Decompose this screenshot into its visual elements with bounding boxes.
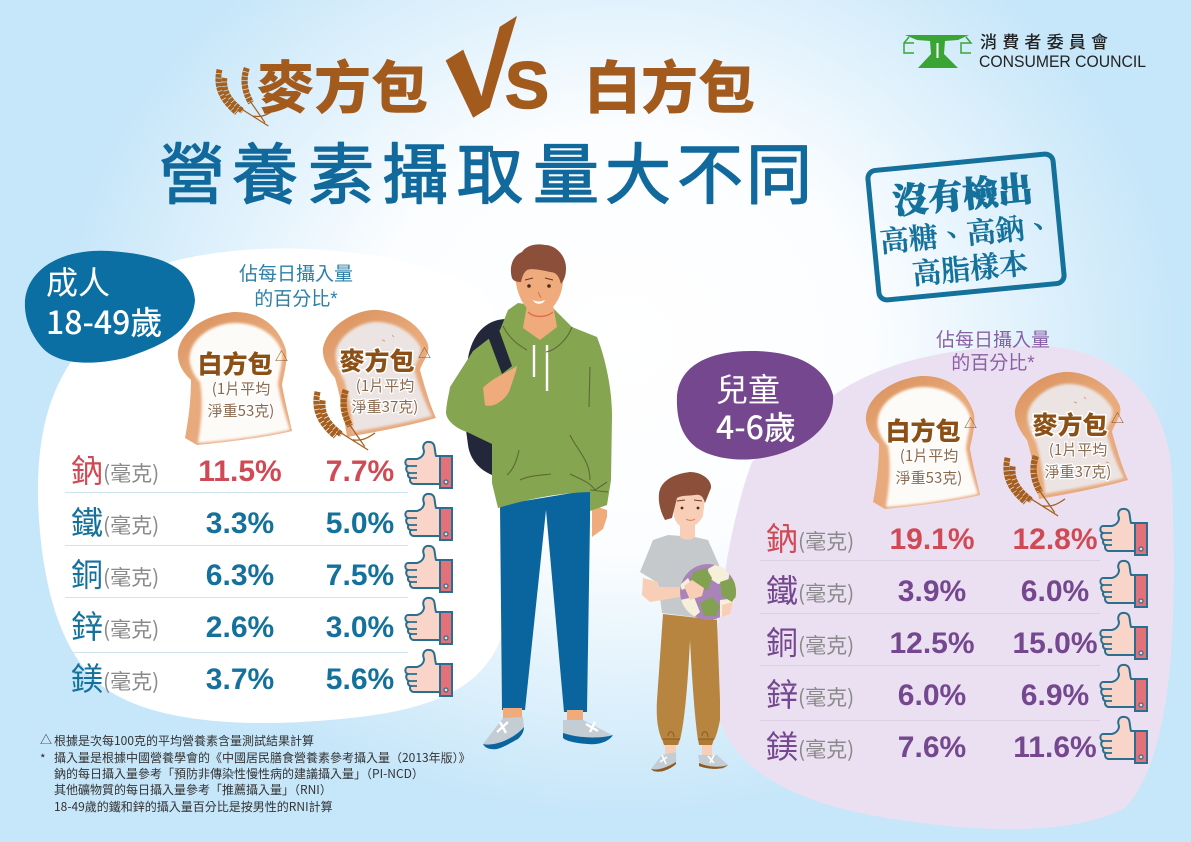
row: copper xyxy=(766,613,1147,664)
hoodie cords xyxy=(534,345,547,391)
row: zinc: 鋅 xyxy=(71,602,103,648)
bread: child wholemeal bread: 淨重37克) xyxy=(1045,461,1111,482)
bread: adult white bread: 淨重53克) xyxy=(208,400,274,421)
laces xyxy=(660,755,714,764)
pants xyxy=(657,614,720,740)
right hand xyxy=(592,505,607,537)
ankles xyxy=(503,708,583,724)
row: iron: 5.0% xyxy=(326,507,394,540)
row: magnesium: (毫克) xyxy=(798,734,854,764)
pants xyxy=(500,490,590,712)
bread: adult white bread: 白方包 xyxy=(197,345,273,381)
hands xyxy=(684,580,733,617)
title: first line xyxy=(218,0,755,157)
illustration: boy with ball xyxy=(640,472,740,772)
bread: adult wholemeal bread xyxy=(316,310,436,450)
backpack xyxy=(466,319,514,475)
row: zinc: 2.6% xyxy=(206,611,274,644)
heading: wholemeal bread: 麥方包 xyxy=(257,43,428,125)
left hand xyxy=(483,366,517,406)
bread: adult wholemeal bread: 淨重37克) xyxy=(352,396,418,417)
boy face xyxy=(677,500,702,520)
logo text: Chinese: 消費者委員會 xyxy=(980,28,1113,53)
row: magnesium: 5.6% xyxy=(326,663,394,696)
row: magnesium xyxy=(766,717,1147,768)
row: copper: 銅 xyxy=(766,618,798,664)
arm xyxy=(642,578,705,602)
ankles xyxy=(665,745,712,755)
row: zinc: 鋅 xyxy=(766,670,798,716)
footnotes: * xyxy=(40,750,46,767)
row: magnesium: 3.7% xyxy=(206,663,274,696)
table: adults xyxy=(71,442,452,700)
bread: child wholemeal bread: (1片平均 xyxy=(1049,439,1107,460)
row: sodium: 7.7% xyxy=(326,455,394,488)
caption: adult daily intake: 的百分比* xyxy=(254,288,338,310)
caption: child daily intake xyxy=(936,329,1050,374)
footnotes: △ xyxy=(40,731,52,748)
icon: title wheat xyxy=(218,68,275,126)
bread: child white bread xyxy=(866,376,980,509)
row: sodium: 鈉 xyxy=(766,514,798,560)
badge: children 4-6 xyxy=(677,351,833,460)
shirt xyxy=(640,535,720,620)
bread: child white bread: 白方包 xyxy=(885,412,961,448)
badge: adults 18-49 xyxy=(25,251,195,363)
row: sodium: 12.8% xyxy=(1012,523,1098,556)
footnotes: 鈉的每日攝入量參考「預防非傳染性慢性病的建議攝入量」（PI-NCD） xyxy=(54,765,424,782)
icon: green scale xyxy=(904,35,971,68)
row: copper: 12.5% xyxy=(889,627,975,660)
row: iron xyxy=(766,561,1147,612)
footnotes: 攝入量是根據中國營養學會的《中國居民膳食營養素參考攝入量（2013年版）》 xyxy=(54,749,471,766)
row: magnesium: 11.6% xyxy=(1013,731,1097,764)
row: zinc: 3.0% xyxy=(326,611,394,644)
footnotes xyxy=(40,731,471,815)
row: copper: (毫克) xyxy=(798,630,854,660)
row: magnesium xyxy=(71,650,452,700)
badge: children 4-6: 兒童 xyxy=(716,365,780,411)
shoulder strap xyxy=(487,327,512,374)
laces xyxy=(497,722,598,733)
row: magnesium: 7.6% xyxy=(898,731,966,764)
bread: adult white bread xyxy=(178,312,292,445)
row: sodium: 鈉 xyxy=(71,446,103,492)
illustration: man with backpack xyxy=(446,244,613,749)
bread: adult white bread: (1片平均 xyxy=(212,378,270,399)
panel: child background xyxy=(715,346,1174,829)
bread: adult wholemeal bread: 麥方包 xyxy=(339,342,415,378)
row: magnesium: 鎂 xyxy=(766,722,798,768)
logo: Consumer Council xyxy=(904,28,1146,71)
footnotes: 18-49歲的鐵和鋅的攝入量百分比是按男性的RNI計算 xyxy=(54,798,333,815)
caption: child daily intake: 的百分比* xyxy=(951,352,1035,374)
collar line xyxy=(528,312,553,316)
neck and head xyxy=(680,522,695,540)
hoodie xyxy=(446,303,612,511)
stamp callout: 高脂樣本 xyxy=(910,241,1030,293)
row: sodium xyxy=(71,442,452,492)
logo text: English: CONSUMER COUNCIL xyxy=(979,53,1146,71)
row: sodium: 11.5% xyxy=(198,455,282,488)
hair xyxy=(511,244,566,284)
bread: child wholemeal bread xyxy=(1006,372,1128,516)
title: second line: 營養素攝取量大不同 xyxy=(159,122,812,218)
panel: adult background xyxy=(38,248,514,723)
bread: child wholemeal bread: 麥方包 xyxy=(1032,406,1108,442)
row: zinc xyxy=(766,665,1147,716)
bread: child white bread: 淨重53克) xyxy=(896,467,962,488)
table: children xyxy=(766,509,1147,768)
row: copper: 6.3% xyxy=(206,559,274,592)
badge: adults 18-49: 成人 xyxy=(46,258,110,304)
row: zinc: 6.0% xyxy=(898,679,966,712)
row: sodium xyxy=(766,509,1147,560)
cuff lines xyxy=(663,732,714,739)
row: zinc: (毫克) xyxy=(103,614,159,644)
ball xyxy=(680,563,740,621)
row: magnesium: (毫克) xyxy=(103,666,159,696)
row: zinc: (毫克) xyxy=(798,682,854,712)
row: sodium: (毫克) xyxy=(103,458,159,488)
head xyxy=(515,265,563,313)
row: iron: 3.9% xyxy=(898,575,966,608)
row: iron: 3.3% xyxy=(206,507,274,540)
row: sodium: 19.1% xyxy=(889,523,975,556)
row: iron: (毫克) xyxy=(798,578,854,608)
stamp callout xyxy=(867,153,1065,301)
row: copper: 7.5% xyxy=(326,559,394,592)
bread: adult wholemeal bread: △ xyxy=(418,346,431,361)
row: iron: 鐵 xyxy=(766,566,798,612)
hoodie lines xyxy=(503,326,608,492)
stamp callout: 沒有檢出 xyxy=(891,162,1035,225)
pants cuffs xyxy=(662,739,714,745)
badge: adults 18-49: 18-49歲 xyxy=(46,298,162,344)
caption: child daily intake: 佔每日攝入量 xyxy=(936,329,1050,351)
row: copper: (毫克) xyxy=(103,562,159,592)
heading: white bread: 白方包 xyxy=(584,43,755,125)
heading: Vs xyxy=(446,0,549,157)
bread: adult wholemeal bread: (1片平均 xyxy=(356,375,414,396)
neck and chest xyxy=(523,305,557,340)
row: iron xyxy=(71,494,452,544)
row: iron: 鐵 xyxy=(71,498,103,544)
footnotes: 其他礦物質的每日攝入量參考「推薦攝入量」（RNI） xyxy=(54,781,332,798)
row: iron: (毫克) xyxy=(103,510,159,540)
face details xyxy=(525,278,553,304)
row: sodium: (毫克) xyxy=(798,526,854,556)
badge: children 4-6: 4-6歲 xyxy=(716,403,796,449)
bread: child wholemeal bread: △ xyxy=(1111,411,1124,426)
row: copper: 銅 xyxy=(71,550,103,596)
shoes xyxy=(651,752,728,772)
stamp callout: 高糖、高鈉、 xyxy=(878,204,1055,261)
caption: adult daily intake xyxy=(239,263,353,310)
heading: Vs: S xyxy=(505,48,549,122)
caption: adult daily intake: 佔每日攝入量 xyxy=(239,263,353,285)
row: copper xyxy=(71,546,452,596)
shoes xyxy=(483,717,612,748)
row: zinc xyxy=(71,598,452,648)
bread: child white bread: △ xyxy=(964,416,977,431)
row: iron: 6.0% xyxy=(1021,575,1089,608)
row: copper: 15.0% xyxy=(1012,627,1098,660)
bread: adult white bread: △ xyxy=(275,349,288,364)
row: zinc: 6.9% xyxy=(1021,679,1089,712)
row: magnesium: 鎂 xyxy=(71,654,103,700)
footnotes: 根據是次每100克的平均營養素含量測試結果計算 xyxy=(54,732,314,749)
hair xyxy=(659,472,711,520)
bread: child white bread: (1片平均 xyxy=(900,445,958,466)
